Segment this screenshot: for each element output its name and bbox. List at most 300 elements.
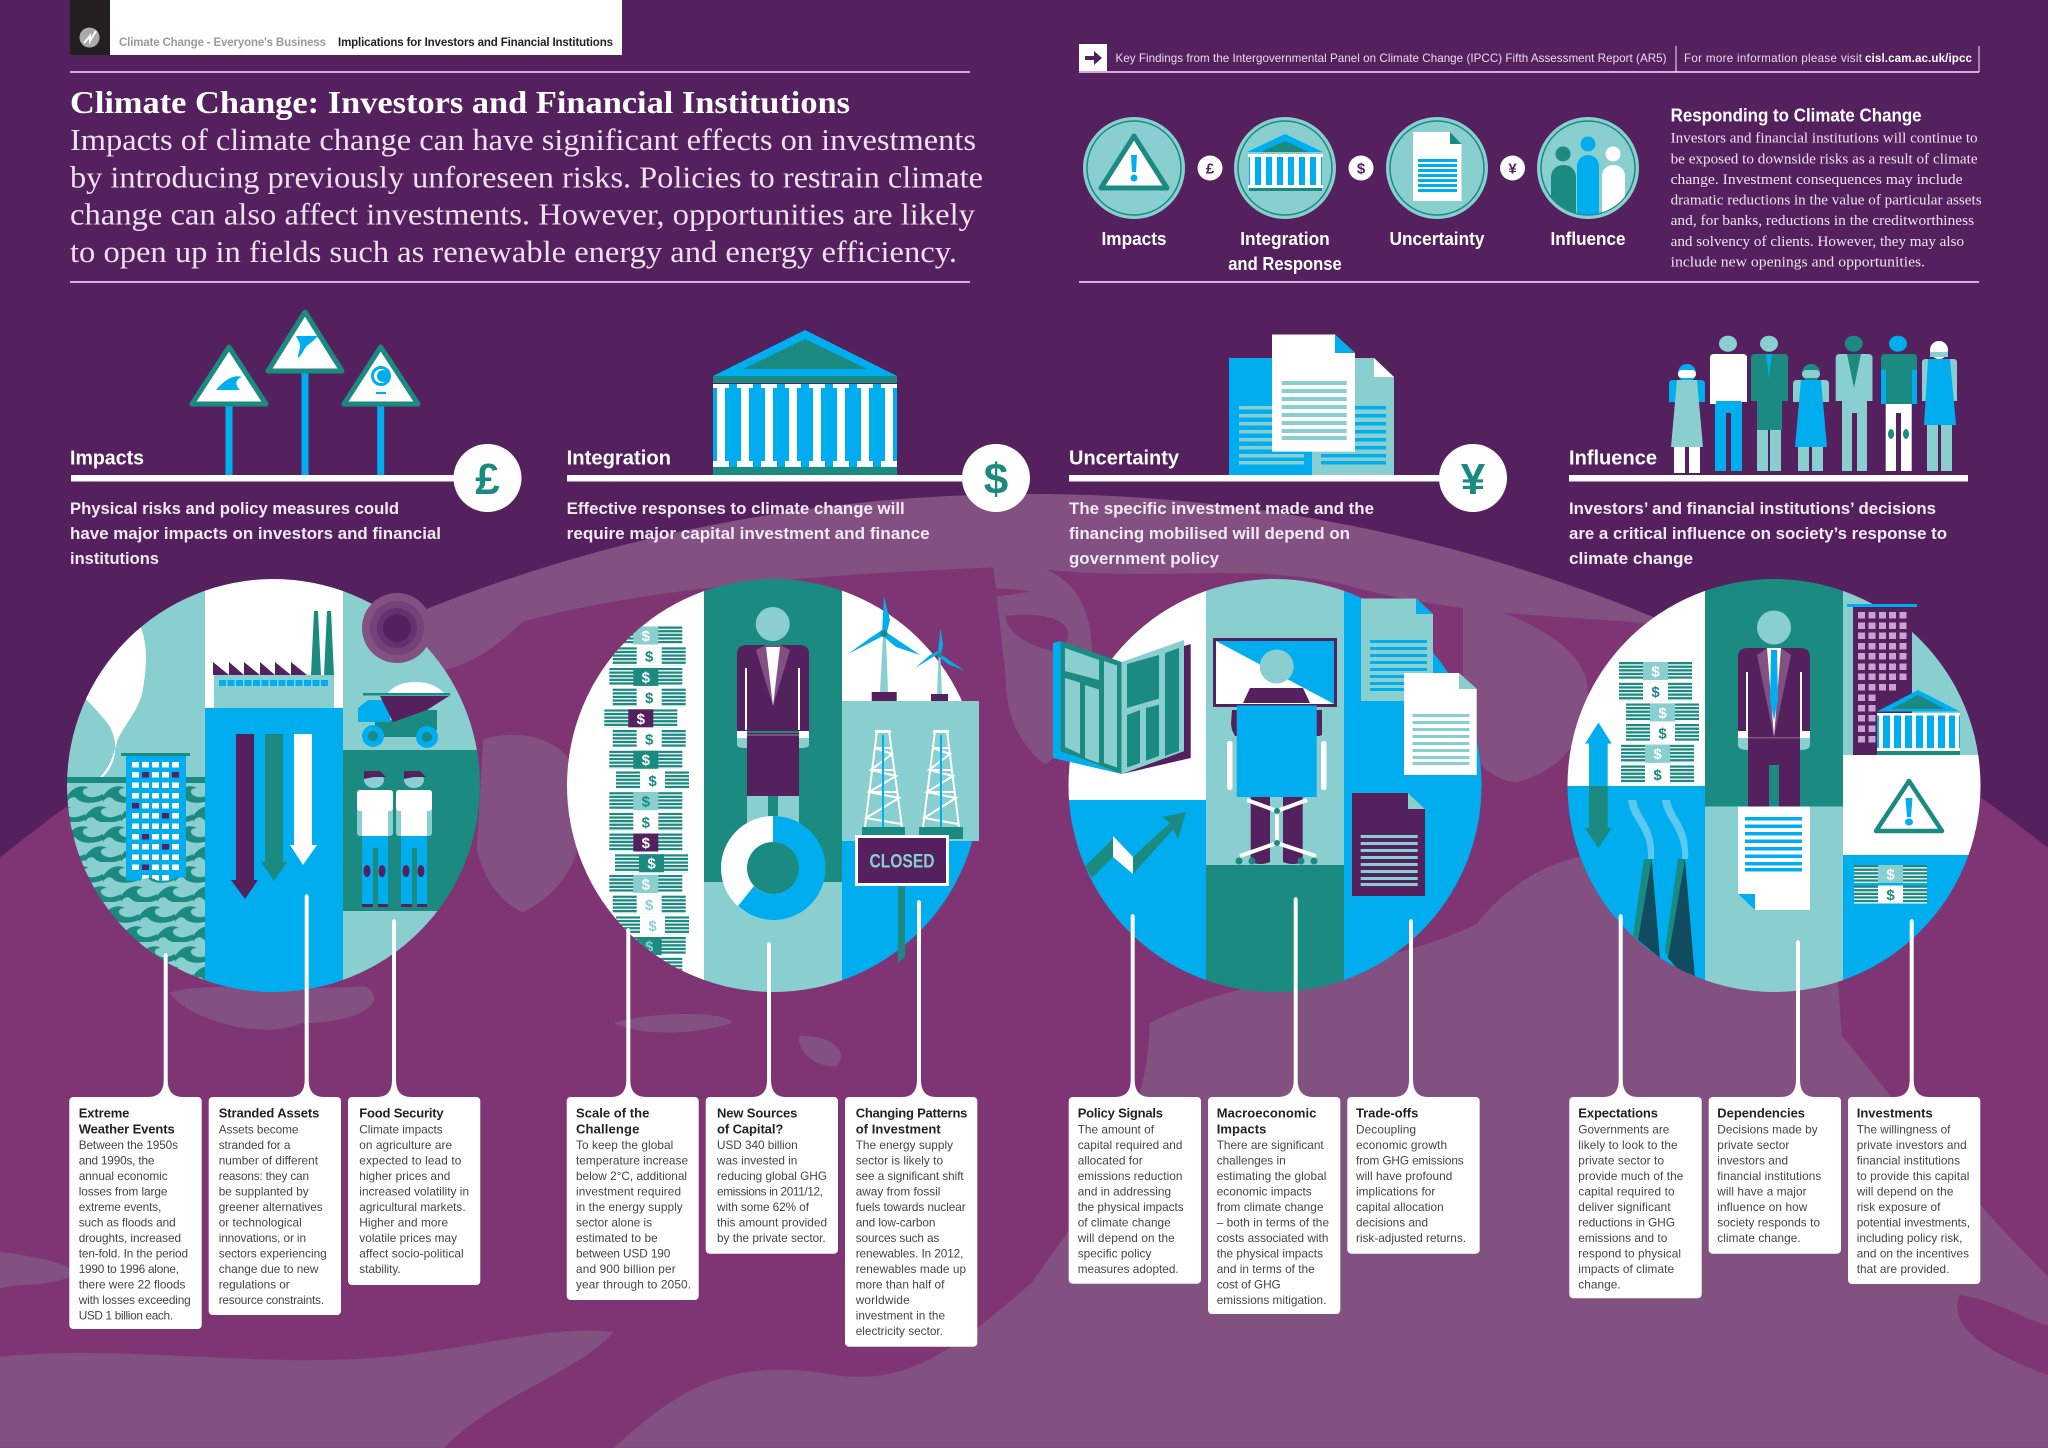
icon: dollar coin: $ [984,455,1008,504]
card body: temperature increase [576,1154,688,1168]
card body: from GHG emissions [1356,1154,1464,1168]
card body [1578,1122,1684,1292]
legend icon: integration [1234,117,1336,219]
arrows down [231,734,317,899]
card title: Policy Signals [1078,1106,1163,1121]
legend icon: influence [1537,117,1639,225]
card body: implications for [1356,1184,1435,1198]
card title: of Capital? [717,1121,783,1136]
card body: stranded for a [219,1138,291,1152]
card body: impacts of climate [1578,1262,1674,1276]
key findings bar: cisl.cam.ac.uk/ipcc [1865,52,1973,65]
key findings bar: For more information please visit [1684,52,1863,65]
circular illustration influence [1567,579,1981,992]
card body: – both in terms of the [1217,1216,1329,1230]
card body: emissions in 2011/12, [717,1184,823,1198]
card body: worldwide [855,1293,910,1307]
factory [213,611,334,708]
header tab [70,0,622,55]
card body: USD 340 billion [717,1138,798,1152]
influence summary: are a critical influence on society’s response to [1569,524,1947,543]
money stack: $ [642,628,651,645]
card body: droughts, increased [79,1231,181,1245]
card body [219,1122,327,1307]
money stack influence: $ [1653,767,1662,784]
card body: cost of GHG [1217,1278,1281,1292]
card body: stability. [359,1262,401,1276]
influence summary: climate change [1569,549,1693,568]
panel: integration [567,330,1030,1347]
card body: financial institutions [1857,1154,1960,1168]
header rule bottom [70,281,970,283]
card body: private sector to [1578,1154,1664,1168]
card body: challenges in [1217,1154,1286,1168]
card: policy signals [1069,1097,1201,1284]
card body: emissions reduction [1078,1169,1182,1183]
card body: between USD 190 [576,1246,671,1260]
card: dependencies [1709,1097,1841,1254]
card body [855,1138,966,1338]
legend coin yen [1500,156,1525,180]
card: investments [1848,1097,1980,1284]
title: Climate Change: Investors and Financial Institutions [70,84,850,120]
card body: affect socio-political [359,1246,464,1260]
money stack: $ [642,876,651,893]
card body: will depend on the [1856,1184,1954,1198]
card title [576,1106,649,1136]
card body: year through to 2050. [576,1278,691,1292]
card body: with some 62% of [716,1200,810,1214]
impacts summary: institutions [70,549,159,568]
card body: in the energy supply [576,1200,683,1214]
card body: The energy supply [856,1138,953,1152]
card body: costs associated with [1217,1231,1328,1245]
connectors impacts [148,894,411,1097]
legend labels: Impacts [1102,228,1166,249]
card body: there were 22 floods [79,1278,185,1292]
icon: warning [1876,781,1942,831]
circular illustration uncertainty [1068,579,1482,992]
card body: USD 1 billion each. [79,1308,173,1322]
card body: Higher and more [359,1216,448,1230]
closed sign [855,835,949,886]
card body: below 2°C, additional [576,1169,687,1183]
card body: provide much of the [1578,1169,1684,1183]
card title: Stranded Assets [219,1106,319,1121]
money stack: $ [645,938,654,956]
impacts summary [70,499,441,568]
card body: sector alone is [576,1216,652,1230]
influence summary [1569,499,1947,568]
businesswoman [737,607,809,836]
card body: capital allocation [1356,1200,1444,1214]
card body: 1990 to 1996 alone, [79,1262,179,1276]
card body: will have a major [1716,1184,1807,1198]
bank mini [1877,690,1960,755]
money stack: $ [642,669,651,686]
card body [78,1138,191,1322]
money stack: $ [647,856,656,873]
legend coin dollar: $ [1357,160,1366,178]
responding text: include new openings and opportunities. [1671,255,1925,271]
card body: resource constraints. [219,1293,324,1307]
card body: increased volatility in [359,1184,469,1198]
card body: to provide this capital [1857,1169,1969,1183]
card body: and 900 billion per [576,1262,676,1276]
card body: ten-fold. In the period [79,1246,188,1260]
money stack: $ [645,690,654,707]
money stack influence: $ [1658,726,1667,742]
card title: Challenge [576,1121,639,1136]
card body: likely to look to the [1578,1138,1678,1152]
influence rule [1569,475,1968,482]
integration rule [567,475,962,482]
intro text [70,122,983,269]
person at monitor [1213,638,1337,864]
card title: Changing Patterns [856,1106,967,1121]
card body: extreme events, [79,1200,161,1214]
documents right [1352,598,1477,896]
panel: influence [1567,336,1981,1298]
panel: impacts [67,312,522,1329]
card body: reductions in GHG [1578,1216,1675,1230]
card body: measures adopted. [1078,1262,1179,1276]
legend coin yen: ¥ [1508,160,1517,178]
intro text: change can also affect investments. However, opportunities are likely [70,196,976,232]
card body: economic growth [1356,1138,1447,1152]
impacts heading: Impacts [70,448,144,470]
card body: reducing global GHG [717,1169,827,1183]
icon: people [1669,336,1957,473]
card title: Weather Events [79,1121,175,1136]
card body: investors and [1717,1154,1788,1168]
card body: and on the incentives [1857,1246,1969,1260]
card body: more than half of [856,1278,945,1292]
card body: Between the 1950s [79,1138,178,1152]
card body: economic impacts [1217,1184,1312,1198]
icon: dollar coin [962,444,1030,512]
legend coin pound [1198,156,1222,180]
responding text: and solvency of clients. However, they may also [1671,234,1964,250]
card body: by the private sector. [717,1231,826,1245]
card body: the physical impacts [1217,1246,1323,1260]
card body: emissions and to [1578,1231,1668,1245]
card body: volatile prices may [359,1231,457,1245]
uncertainty heading: Uncertainty [1069,448,1180,470]
card body: risk-adjusted returns. [1356,1231,1466,1245]
card body: and in terms of the [1217,1262,1315,1276]
legend labels: Uncertainty [1390,228,1485,249]
card: stranded assets [209,1097,341,1315]
money stack: $ [642,794,651,811]
card body: and low-carbon [856,1216,935,1230]
legend coin dollar [1348,156,1374,180]
circular illustration impacts [67,579,481,992]
office tower [1847,604,1917,755]
uncertainty summary: government policy [1069,549,1220,568]
connectors integration [611,900,936,1097]
uncertainty summary: The specific investment made and the [1069,499,1374,518]
money stack: $ [642,752,651,769]
card body: risk exposure of [1857,1200,1941,1214]
card body: The amount of [1078,1122,1155,1136]
card body: agricultural markets. [359,1200,466,1214]
card title: Extreme [79,1106,129,1121]
card body: that are provided. [1857,1262,1949,1276]
dump truck [358,682,450,748]
card body: estimated to be [576,1231,658,1245]
card body [576,1138,691,1292]
card body: regulations or [219,1278,290,1292]
responding text: change. Investment consequences may include [1671,172,1963,188]
card body: see a significant shift [856,1169,964,1183]
card body [1716,1122,1821,1245]
integration heading: Integration [567,448,671,470]
legend icon: uncertainty [1386,117,1488,219]
money stack influence [1619,662,1699,784]
uncertainty rule [1069,475,1444,482]
card body: private sector [1717,1138,1789,1152]
card: trade-offs [1347,1097,1480,1254]
money stack: $ [645,897,654,914]
card body: estimating the global [1217,1169,1326,1183]
connectors influence [1603,914,1929,1097]
money stack influence: $ [1651,684,1660,701]
donut chart [721,816,825,920]
card body: such as floods and [79,1216,176,1230]
card title: Macroeconomic [1217,1106,1316,1121]
card body: away from fossil [856,1184,940,1198]
card body: Decoupling [1356,1122,1416,1136]
card body: Governments are [1578,1122,1670,1136]
intro text: to open up in fields such as renewable energy and energy efficiency. [70,234,957,269]
money stack influence: $ [1653,746,1662,763]
circular illustration integration [567,579,980,992]
integration summary: Effective responses to climate change will [567,499,905,518]
card body: on agriculture are [359,1138,452,1152]
card body [1217,1138,1329,1307]
newspaper [1053,640,1191,774]
card body: including policy risk, [1857,1231,1962,1245]
card title: Scale of the [576,1106,649,1121]
card title: Impacts [1217,1121,1266,1136]
card body: Climate impacts [359,1122,443,1136]
money stack [604,626,689,976]
card body: change due to new [219,1262,319,1276]
card body: change. [1578,1278,1621,1292]
card body [1355,1122,1466,1245]
legend labels: and Response [1228,253,1342,274]
wind turbines [848,596,965,701]
card body: climate change. [1717,1231,1801,1245]
card body: electricity sector. [856,1324,943,1338]
icon: warning signs [192,312,418,475]
card body: was invested in [716,1154,797,1168]
card body: sources such as [856,1231,939,1245]
card title: Dependencies [1717,1106,1805,1121]
intro text: by introducing previously unforeseen risks. Policies to restrain climate [70,160,983,194]
legend icon: impacts [1083,117,1185,219]
card body: innovations, or in [219,1231,306,1245]
card: extreme weather events [69,1097,202,1329]
card body: capital required to [1578,1184,1675,1198]
responding text: and, for banks, reductions in the creditworthiness [1671,213,1975,229]
money stack: $ [648,918,657,935]
card body: will have profound [1355,1169,1452,1183]
integration summary: require major capital investment and finance [567,524,930,543]
card body: renewables made up [856,1262,966,1276]
responding text: be exposed to downside risks as a result of climate [1671,151,1978,167]
card body: society responds to [1717,1216,1820,1230]
key findings bar [1079,44,1980,73]
card body: investment in the [856,1308,945,1322]
impacts rule [71,475,461,482]
impacts summary: Physical risks and policy measures could [70,499,399,518]
header tab: Climate Change - Everyone's Business [119,37,326,49]
card title: Expectations [1578,1106,1658,1121]
card body: influence on how [1717,1200,1808,1214]
responding heading: Responding to Climate Change [1671,105,1922,126]
card body: respond to physical [1578,1246,1681,1260]
icon: pound coin [454,444,522,512]
card: scale of the challenge [567,1097,699,1300]
card body [359,1122,469,1276]
responding text [1671,131,1982,271]
card body: sector is likely to [856,1154,943,1168]
card body: sectors experiencing [219,1246,327,1260]
money stack: $ [642,814,651,831]
legend labels: Influence [1550,228,1626,249]
card body: private investors and [1857,1138,1967,1152]
icon: bank [713,330,897,475]
responding text: Investors and financial institutions will continue to [1671,131,1978,147]
card body: reasons: they can [219,1169,309,1183]
card body: There are significant [1217,1138,1324,1152]
icon: pollution [362,593,432,663]
icon: yen coin [1439,444,1507,512]
card: changing patterns of investment [845,1097,977,1347]
card body: or technological [219,1216,302,1230]
card body: the physical impacts [1078,1200,1184,1214]
card body: and in addressing [1078,1184,1171,1198]
card body: greener alternatives [219,1200,323,1214]
card body [1077,1122,1184,1276]
card: macroeconomic impacts [1208,1097,1340,1314]
chimneys in water [1628,800,1696,990]
card body: will depend on the [1077,1231,1175,1245]
card body: emissions mitigation. [1217,1293,1326,1307]
farmers [357,771,432,907]
money stack influence: $ [1658,705,1667,722]
impacts summary: have major impacts on investors and financial [70,524,441,543]
card body: fuels towards nuclear [856,1200,966,1214]
card title: Trade-offs [1356,1106,1418,1121]
legend labels: Integration [1240,228,1330,249]
card body: potential investments, [1857,1216,1970,1230]
card body: of climate change [1078,1216,1171,1230]
responding text: dramatic reductions in the value of particular assets [1671,193,1982,209]
icon: documents [1229,334,1394,475]
card body: number of different [219,1154,319,1168]
icon: pound coin: £ [475,455,500,504]
closed sign: CLOSED [870,852,934,873]
icon: yen coin: ¥ [1461,455,1486,504]
card body: expected to lead to [359,1154,462,1168]
card body: decisions and [1356,1216,1428,1230]
light panel [842,701,979,841]
card body: losses from large [79,1184,168,1198]
header rule top [70,71,970,73]
card body: The willingness of [1857,1122,1951,1136]
panel: uncertainty [1053,334,1507,1314]
key findings bar: Key Findings from the Intergovernmental Panel on Climate Change (IPCC) Fifth Assessment Report (AR5) [1116,52,1667,65]
card body: To keep the global [576,1138,673,1152]
influence summary: Investors’ and financial institutions’ decisions [1569,499,1936,518]
money stack: $ [645,649,654,666]
card body: specific policy [1078,1246,1151,1260]
card body: from climate change [1217,1200,1324,1214]
growth arrow [1085,812,1186,878]
money stack influence: $ [1651,664,1660,680]
card title: Food Security [359,1106,444,1121]
card body: Decisions made by [1717,1122,1818,1136]
businessman [1738,610,1810,806]
card body: renewables. In 2012, [856,1246,963,1260]
header tab: Implications for Investors and Financial Institutions [338,37,613,49]
card title [856,1106,967,1136]
double arrow [1585,722,1612,848]
card body: deliver significant [1578,1200,1671,1214]
uncertainty summary: financing mobilised will depend on [1069,524,1350,543]
card body: this amount provided [717,1216,827,1230]
card body [716,1138,827,1245]
card title: Investments [1857,1106,1933,1121]
card title [1217,1106,1316,1136]
card body: Assets become [219,1122,299,1136]
card body: allocated for [1078,1154,1143,1168]
card: expectations [1569,1097,1702,1298]
card body: be supplanted by [219,1184,309,1198]
card body: annual economic [79,1169,168,1183]
card title [717,1106,797,1136]
card body: capital required and [1078,1138,1182,1152]
intro text: Impacts of climate change can have significant effects on investments [70,122,976,157]
legend coin pound: £ [1206,160,1215,178]
card title: of Investment [856,1121,941,1136]
money stack: $ [637,711,646,728]
money bill [1854,865,1927,904]
legend labels [1102,228,1626,274]
card title [79,1106,175,1136]
card body: and 1990s, the [79,1154,155,1168]
uncertainty summary [1069,499,1374,568]
header rule right [1079,281,1979,283]
card body [1856,1122,1970,1276]
influence heading: Influence [1569,448,1657,470]
money stack: $ [642,835,651,852]
card: food security [348,1097,480,1285]
card: new sources of capital [706,1097,838,1254]
oil rigs [862,730,963,839]
card body: investment required [576,1184,681,1198]
building flooded [110,753,190,960]
card body: with losses exceeding [78,1293,191,1307]
globe map [0,494,2048,1448]
document influence [1738,806,1810,910]
card body: higher prices and [359,1169,450,1183]
integration summary [567,499,930,543]
money stack: $ [648,773,657,790]
